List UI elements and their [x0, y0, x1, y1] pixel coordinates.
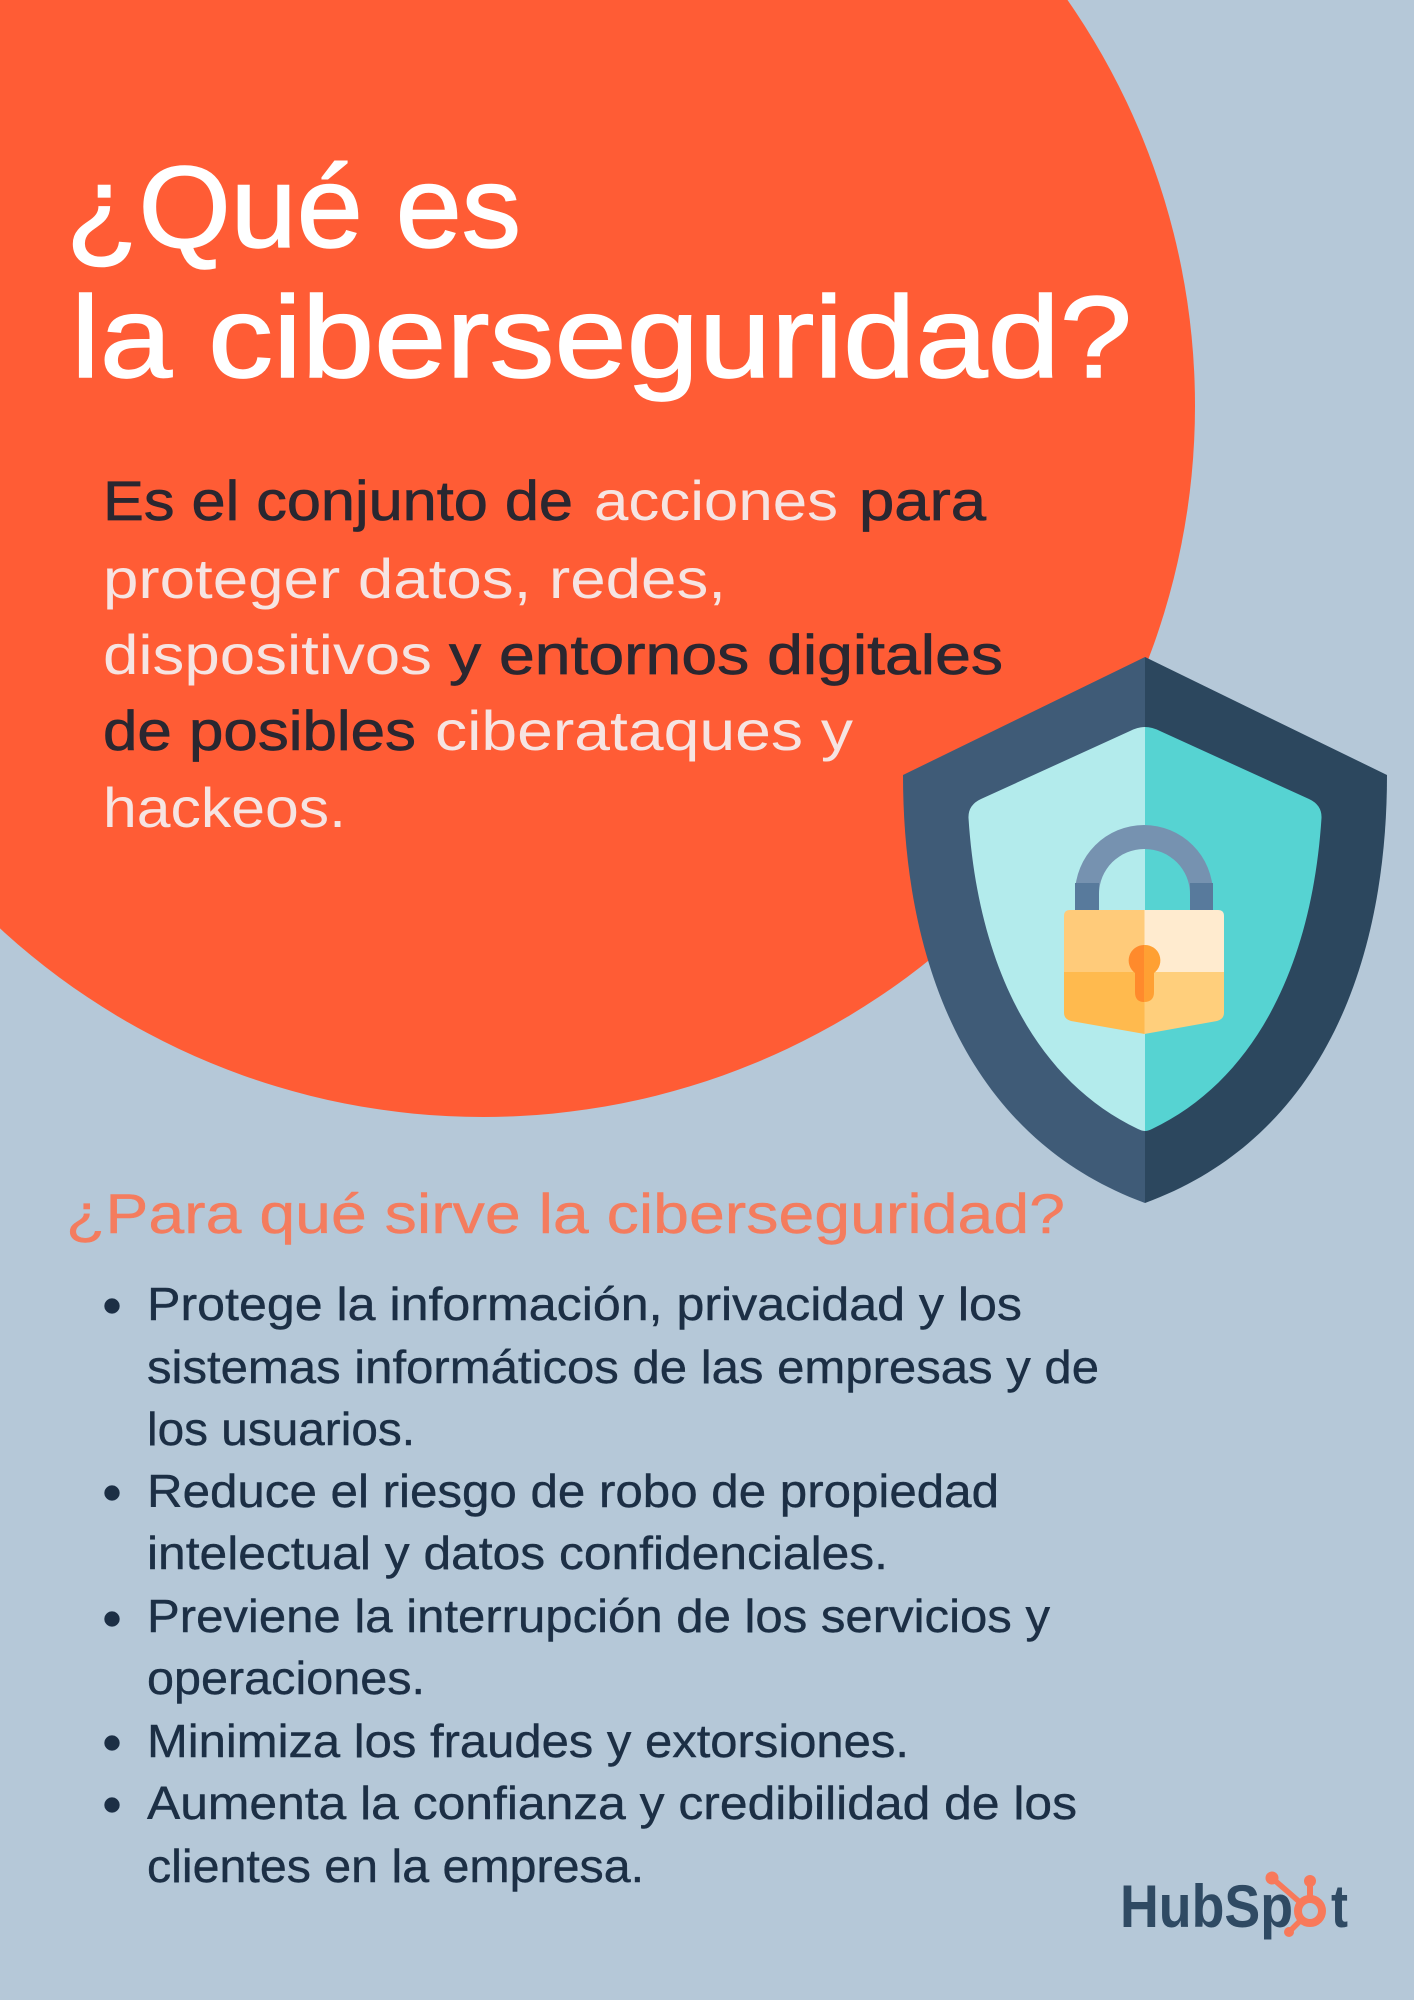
bullet 5: clientes en la empresa.	[147, 1840, 644, 1892]
bullet 4: Minimiza los fraudes y extorsiones.	[147, 1715, 909, 1767]
bullet 1: los usuarios.	[147, 1403, 415, 1455]
icon: sprocket	[1266, 1872, 1322, 1937]
definition text	[103, 469, 1003, 839]
title	[66, 142, 1132, 402]
orange circle panel	[0, 0, 1195, 1117]
bullet 5	[104, 1777, 1077, 1892]
HubSpot logo: HubSp	[1120, 1873, 1293, 1940]
definition text: acciones	[594, 469, 838, 532]
bullet 3	[104, 1590, 1050, 1704]
bullet 1: Protege la información, privacidad y los	[147, 1278, 1022, 1330]
title: la ciberseguridad?	[71, 272, 1132, 402]
shield inner right half	[1145, 727, 1322, 1131]
definition text: para	[859, 469, 987, 532]
definition text: ciberataques y	[435, 699, 853, 762]
shield outer left half	[903, 657, 1145, 1203]
definition text: proteger datos, redes,	[103, 547, 726, 610]
icon: shield with padlock	[903, 657, 1387, 1203]
bullet 3: Previene la interrupción de los servicios y	[147, 1590, 1050, 1642]
shield outer right half	[1145, 657, 1387, 1203]
title: ¿Qué es	[66, 142, 521, 272]
bullet 1: sistemas informáticos de las empresas y de	[147, 1341, 1099, 1393]
bullet 2: intelectual y datos confidenciales.	[147, 1527, 888, 1579]
bullet 2	[104, 1465, 999, 1579]
shield inner left half	[968, 727, 1145, 1131]
HubSpot logo: t	[1331, 1873, 1348, 1940]
definition text: de posibles	[103, 699, 416, 762]
padlock body	[1064, 910, 1224, 1034]
padlock keyhole	[1129, 945, 1160, 1002]
bullet 2: Reduce el riesgo de robo de propiedad	[147, 1465, 999, 1517]
bullet 5: Aumenta la confianza y credibilidad de los	[147, 1777, 1077, 1829]
definition text: dispositivos	[103, 623, 432, 686]
bullet 1	[104, 1278, 1099, 1455]
definition text: hackeos.	[103, 776, 346, 839]
definition text: Es el conjunto de	[103, 469, 573, 532]
definition text: y entornos digitales	[449, 623, 1003, 686]
subheading: ¿Para qué sirve la ciberseguridad?	[66, 1182, 1065, 1245]
bullet 3: operaciones.	[147, 1652, 425, 1704]
padlock shackle	[1075, 825, 1213, 910]
bullet list	[104, 1278, 1099, 1892]
